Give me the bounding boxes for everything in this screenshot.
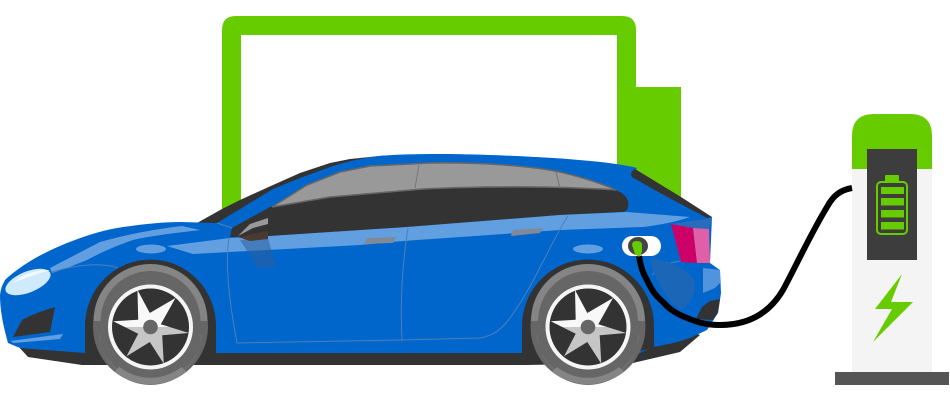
charge port — [622, 236, 661, 256]
body side highlight — [167, 212, 690, 254]
rear spoiler shadow — [631, 169, 712, 218]
window pillars — [415, 165, 560, 188]
rear reflector — [703, 268, 720, 293]
door and panel lines — [52, 216, 682, 343]
roof shadow strip — [197, 156, 385, 228]
upper tail band — [671, 218, 712, 229]
icon: green building outline — [222, 16, 681, 215]
mirror shadow — [240, 238, 276, 268]
lower front highlight — [10, 334, 63, 343]
car underbody — [18, 300, 700, 365]
icon: lightning bolt — [873, 274, 913, 342]
wheel arches — [85, 260, 654, 353]
charging plug — [632, 241, 642, 257]
icon: battery — [877, 175, 907, 234]
station green cap — [852, 114, 932, 169]
side mirror — [238, 218, 268, 241]
headlight — [2, 263, 54, 301]
station base — [835, 372, 949, 385]
rear bumper vent — [696, 299, 720, 320]
door handles — [364, 228, 543, 244]
charging cable — [639, 188, 852, 325]
rear quarter shade — [650, 258, 695, 310]
charging station — [835, 114, 949, 385]
tail light — [671, 224, 710, 263]
rear wheel — [530, 264, 646, 385]
display panel — [867, 149, 917, 260]
station body — [852, 150, 932, 372]
front wheel — [93, 264, 208, 385]
front grille — [13, 307, 55, 337]
window glass — [272, 163, 616, 207]
car — [0, 154, 721, 385]
car body — [0, 154, 721, 353]
side markers — [136, 244, 603, 254]
hood highlight — [50, 226, 200, 273]
window dark band — [230, 187, 628, 237]
